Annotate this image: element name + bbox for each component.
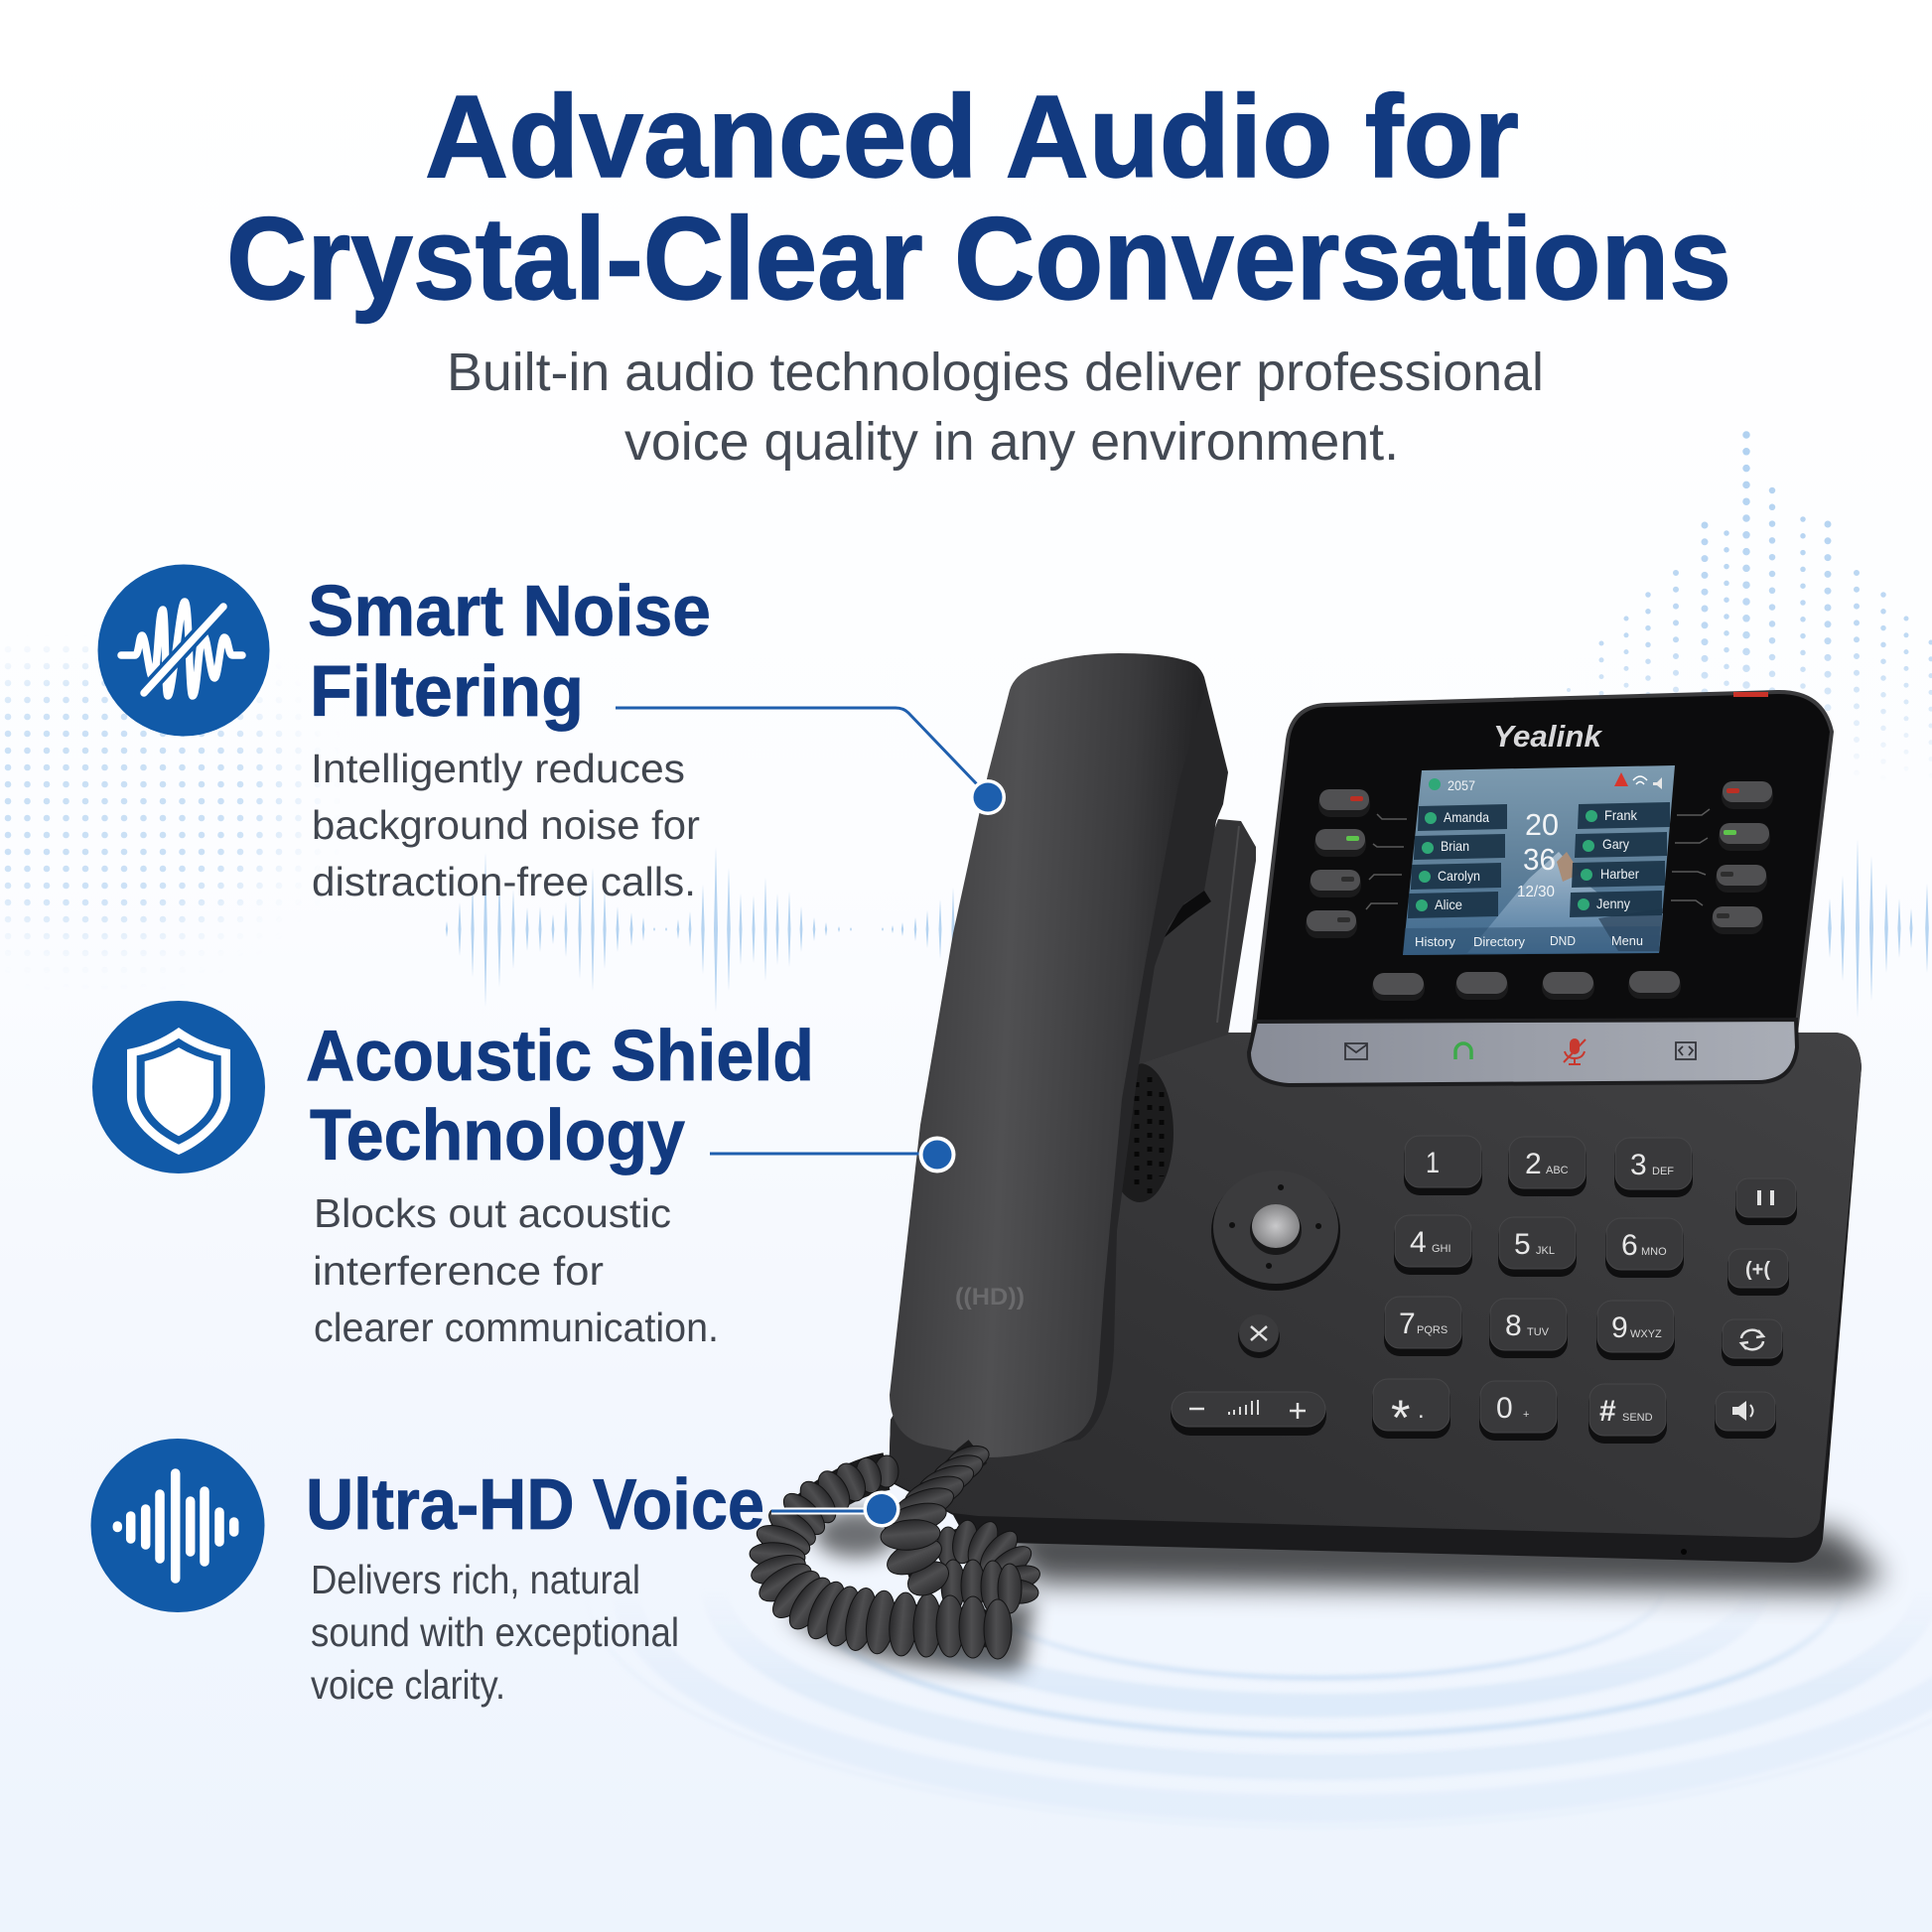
panel: smart noise filtering — [97, 564, 711, 904]
key star: . — [1418, 1397, 1425, 1424]
hd logo: ((HD)) — [955, 1284, 1025, 1311]
key 9 — [1596, 1301, 1675, 1360]
subtitle: voice quality in any environment. — [624, 412, 1399, 472]
key 7 — [1384, 1297, 1462, 1356]
icon: noise wave with slash — [97, 564, 270, 737]
outer coil — [749, 1455, 1012, 1659]
right contacts: Gary — [1602, 836, 1629, 852]
description: Intelligently reduces — [311, 746, 685, 791]
left contacts: Alice — [1435, 897, 1462, 912]
description: voice clarity. — [311, 1662, 505, 1708]
key 8: TUV — [1527, 1326, 1550, 1338]
description — [311, 746, 700, 904]
soft key labels: Menu — [1611, 933, 1643, 948]
description: interference for — [313, 1248, 604, 1294]
key hash send: SEND — [1622, 1412, 1653, 1424]
description — [313, 1190, 719, 1350]
screen clock: 36 — [1523, 842, 1556, 877]
key 4: 4 — [1410, 1226, 1427, 1259]
pause key — [1735, 1178, 1797, 1225]
key 3: 3 — [1630, 1149, 1647, 1181]
key 8: 8 — [1505, 1310, 1522, 1342]
heading: Acoustic Shield — [306, 1017, 814, 1096]
function strip — [1249, 1020, 1797, 1085]
soft key labels: History — [1415, 934, 1456, 949]
key 3: DEF — [1652, 1166, 1674, 1177]
keypad — [1372, 1136, 1693, 1446]
subtitle — [447, 343, 1544, 472]
heading: Technology — [310, 1096, 685, 1175]
heading: Filtering — [310, 652, 584, 732]
icon: headset mode brackets — [1676, 1042, 1696, 1059]
navigation disc — [1211, 1171, 1340, 1291]
key 5 — [1498, 1217, 1577, 1277]
transfer key — [1727, 1249, 1789, 1296]
speaker key — [1715, 1392, 1776, 1439]
phone illustration — [749, 653, 1884, 1670]
title: Advanced Audio for — [425, 71, 1519, 203]
handset cradle and stand support — [1139, 819, 1256, 1064]
icon: muted microphone — [1564, 1038, 1586, 1064]
heading — [308, 572, 711, 732]
left contacts: Brian — [1441, 838, 1469, 854]
key 5: 5 — [1514, 1228, 1531, 1261]
screen clock — [1517, 807, 1559, 900]
key 0 — [1479, 1381, 1558, 1441]
callout: acoustic shield technology — [710, 1136, 955, 1173]
description — [311, 1557, 679, 1708]
coiled cord — [749, 1441, 1042, 1659]
heading: Smart Noise — [308, 572, 711, 651]
red status light — [1733, 692, 1768, 697]
display panel — [1249, 692, 1832, 1085]
icon: voice bars — [91, 1439, 264, 1612]
key hash send — [1588, 1384, 1667, 1444]
soft keys — [1372, 971, 1681, 1001]
left contacts: Carolyn — [1438, 868, 1480, 884]
key 3 — [1614, 1138, 1693, 1197]
decorative dot equalizer right — [1569, 435, 1931, 794]
title — [226, 71, 1731, 325]
right contacts: Harber — [1600, 866, 1639, 882]
screen status bar: 2057 — [1448, 777, 1475, 793]
soft key labels: Directory — [1473, 934, 1525, 949]
callout: smart noise filtering — [616, 708, 1006, 815]
key 4 — [1394, 1215, 1472, 1275]
screen clock: 20 — [1525, 807, 1559, 842]
transfer key: (+( — [1745, 1259, 1770, 1281]
key star — [1372, 1379, 1450, 1446]
volume key — [1171, 1392, 1326, 1436]
key 2: 2 — [1525, 1148, 1542, 1180]
front strand — [880, 1441, 993, 1602]
function keys — [1715, 1178, 1797, 1439]
key 6: MNO — [1641, 1246, 1667, 1258]
key star: * — [1391, 1390, 1410, 1446]
key 9: 9 — [1611, 1311, 1628, 1344]
description: Blocks out acoustic — [314, 1190, 671, 1236]
key hash send: # — [1599, 1395, 1616, 1428]
description: background noise for — [312, 802, 700, 848]
brand logo: Yealink — [1493, 719, 1603, 754]
screen status bar — [1429, 772, 1662, 793]
panel: ultra-hd voice — [91, 1439, 764, 1708]
heading — [306, 1017, 814, 1175]
key 1: 1 — [1426, 1147, 1440, 1179]
handset rear shell — [1052, 660, 1228, 1445]
phone ground shadow — [784, 1510, 1884, 1670]
cancel key — [1238, 1314, 1280, 1358]
soft key labels — [1415, 933, 1643, 949]
title: Crystal-Clear Conversations — [226, 194, 1731, 325]
decorative sound ripples — [656, 1616, 1932, 1821]
line keys right — [1671, 781, 1773, 934]
key 0: + — [1523, 1409, 1529, 1421]
right contacts — [1570, 802, 1670, 917]
key 2 — [1508, 1137, 1587, 1196]
right contacts: Frank — [1604, 807, 1638, 823]
handset front face — [890, 653, 1204, 1457]
right contacts: Jenny — [1596, 896, 1630, 911]
decorative waveform centre — [446, 847, 955, 1012]
key 7: 7 — [1399, 1308, 1416, 1340]
key 5: JKL — [1536, 1245, 1555, 1257]
icon: headset — [1455, 1043, 1471, 1059]
decorative waveform right — [1828, 839, 1929, 1018]
subtitle: Built-in audio technologies deliver professional — [447, 343, 1544, 402]
callout: ultra-hd voice — [771, 1491, 899, 1527]
key 6 — [1605, 1218, 1684, 1278]
description: clearer communication. — [314, 1305, 719, 1350]
key 1 — [1404, 1136, 1482, 1195]
key 2: ABC — [1546, 1165, 1569, 1176]
key 7: PQRS — [1417, 1324, 1448, 1336]
icon: message — [1345, 1043, 1367, 1059]
phone base — [889, 1033, 1862, 1563]
screen clock: 12/30 — [1517, 884, 1555, 900]
colour screen — [1403, 765, 1675, 955]
handset — [890, 653, 1228, 1457]
rear coil — [937, 1517, 1042, 1613]
key 4: GHI — [1432, 1243, 1451, 1255]
redial key — [1722, 1319, 1783, 1366]
soft key labels: DND — [1550, 933, 1576, 948]
key 6: 6 — [1621, 1229, 1638, 1262]
key 8 — [1489, 1299, 1568, 1358]
key 0: 0 — [1496, 1392, 1513, 1425]
left contacts: Amanda — [1444, 809, 1489, 825]
heading: Ultra-HD Voice — [306, 1465, 764, 1545]
line keys left — [1306, 789, 1407, 938]
left contacts — [1408, 804, 1507, 918]
decorative dot field left — [4, 646, 317, 956]
description: sound with exceptional — [311, 1609, 679, 1655]
icon: shield — [92, 1001, 265, 1173]
description: Delivers rich, natural — [311, 1557, 640, 1602]
description: distraction-free calls. — [312, 859, 696, 904]
speaker grille — [1106, 1063, 1173, 1202]
key 9: WXYZ — [1630, 1328, 1662, 1340]
panel: acoustic shield technology — [92, 1001, 814, 1350]
